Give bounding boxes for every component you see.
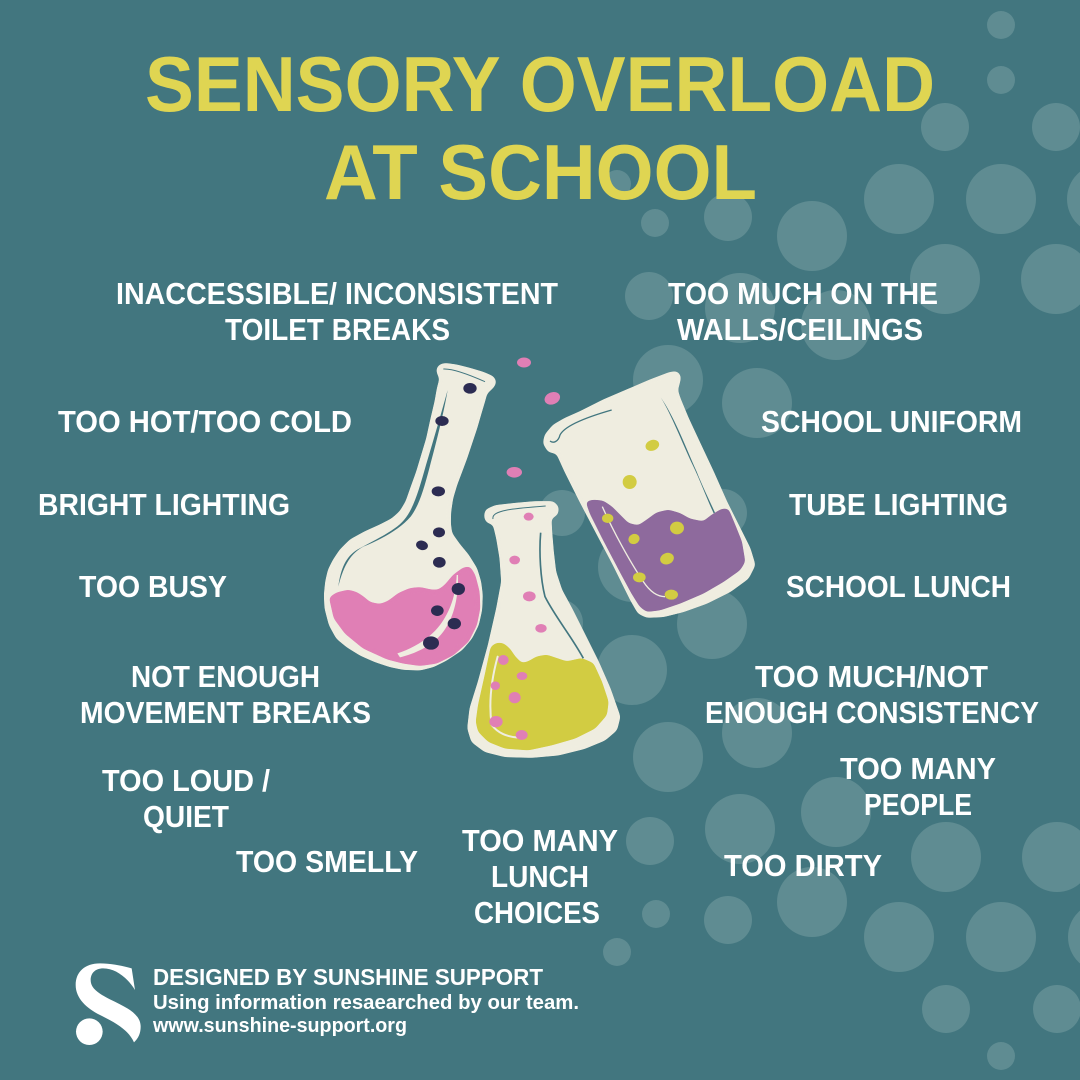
title bbox=[145, 40, 935, 216]
label: school uniform: SCHOOL UNIFORM bbox=[761, 405, 1022, 439]
title: SENSORY OVERLOAD bbox=[145, 40, 935, 128]
label: too many lunch choices: CHOICES bbox=[474, 896, 600, 930]
label: too many lunch choices: TOO MANY bbox=[462, 824, 618, 858]
label: bright lighting: BRIGHT LIGHTING bbox=[38, 488, 290, 522]
footer logo: Sunshine Support S mark bbox=[76, 963, 141, 1045]
label: inaccessible toilet breaks: INACCESSIBLE/ INCONSISTENT bbox=[116, 277, 558, 311]
label: too loud quiet: TOO LOUD / bbox=[102, 764, 270, 798]
label: too much not enough consistency bbox=[705, 660, 1039, 730]
label: not enough movement breaks: NOT ENOUGH bbox=[131, 660, 320, 694]
label: too much not enough consistency: ENOUGH CONSISTENCY bbox=[705, 696, 1039, 730]
label: too much not enough consistency: TOO MUCH/NOT bbox=[755, 660, 988, 694]
label: too many lunch choices bbox=[462, 824, 618, 930]
label: too much on the walls bbox=[668, 277, 938, 347]
label: too many lunch choices: LUNCH bbox=[491, 860, 589, 894]
label: too loud quiet: QUIET bbox=[143, 800, 229, 834]
label: too many people: PEOPLE bbox=[864, 788, 972, 822]
label: tube lighting: TUBE LIGHTING bbox=[789, 488, 1008, 522]
icon: conical flask with yellow liquid bbox=[468, 502, 620, 757]
label: not enough movement breaks: MOVEMENT BREAKS bbox=[80, 696, 371, 730]
title: AT SCHOOL bbox=[324, 128, 757, 216]
footer credit text: www.sunshine-support.org bbox=[152, 1015, 407, 1037]
icon: pink floating drops bbox=[507, 358, 562, 478]
footer credit text: Using information resaearched by our team. bbox=[153, 992, 579, 1014]
label: too smelly: TOO SMELLY bbox=[236, 845, 418, 879]
label: inaccessible toilet breaks bbox=[116, 277, 558, 347]
label: school lunch: SCHOOL LUNCH bbox=[786, 570, 1011, 604]
label: too hot too cold: TOO HOT/TOO COLD bbox=[58, 405, 352, 439]
label: too many people: TOO MANY bbox=[840, 752, 996, 786]
illustration: three lab flasks bbox=[324, 358, 755, 757]
footer credit text bbox=[152, 964, 579, 1037]
label: too loud quiet bbox=[102, 764, 270, 834]
icon: round flask with pink liquid bbox=[324, 363, 496, 670]
label: too much on the walls: TOO MUCH ON THE bbox=[668, 277, 938, 311]
label: too much on the walls: WALLS/CEILINGS bbox=[677, 313, 923, 347]
label: too busy: TOO BUSY bbox=[79, 570, 227, 604]
label: not enough movement breaks bbox=[80, 660, 371, 730]
label: too dirty: TOO DIRTY bbox=[724, 849, 882, 883]
label: too many people bbox=[840, 752, 996, 822]
label: inaccessible toilet breaks: TOILET BREAKS bbox=[225, 313, 450, 347]
footer credit text: DESIGNED BY SUNSHINE SUPPORT bbox=[153, 964, 544, 990]
icon: beaker with purple liquid bbox=[543, 372, 755, 617]
